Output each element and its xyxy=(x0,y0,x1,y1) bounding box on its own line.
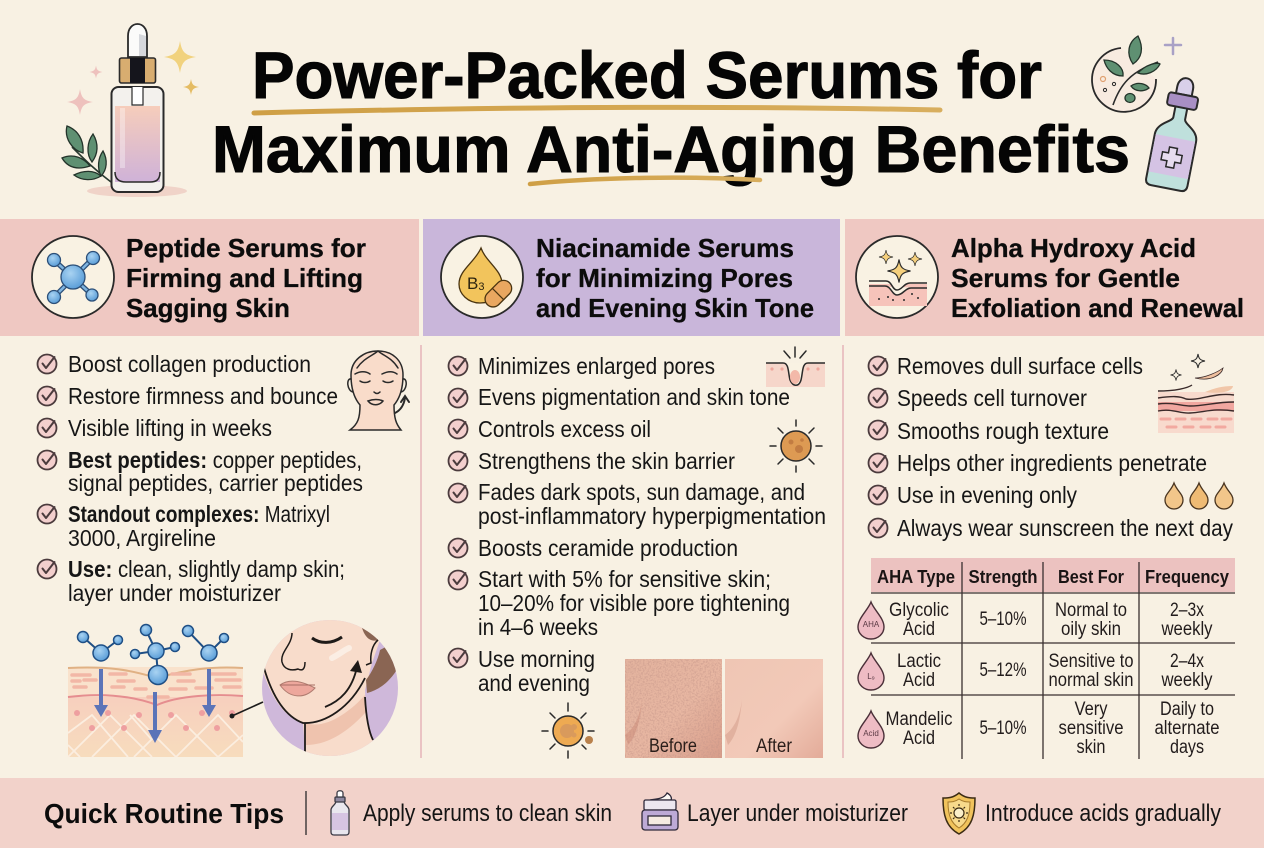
before photo xyxy=(625,659,722,758)
table row: glycolic acid: oily skin xyxy=(1061,619,1121,640)
niacinamide checklist: post-inflammatory hyperpigmentation xyxy=(478,503,826,529)
table row: mandelic acid: days xyxy=(1170,737,1204,758)
table row: glycolic acid: AHA xyxy=(863,620,880,629)
table row: lactic acid: normal skin xyxy=(1048,670,1134,691)
table row: lactic acid xyxy=(858,651,1213,691)
niacinamide checklist: Use morning xyxy=(478,646,595,672)
table row: glycolic acid: weekly xyxy=(1161,619,1213,640)
panel: alpha hydroxy acid serums xyxy=(845,219,1264,759)
niacinamide checklist: Boosts ceramide production xyxy=(478,535,738,561)
niacinamide heading: and Evening Skin Tone xyxy=(536,293,814,323)
icon: moisturizer jar xyxy=(642,793,678,830)
peptide checklist: signal peptides, carrier peptides xyxy=(68,470,363,496)
peptide header band xyxy=(0,219,419,336)
table row: lactic acid: Acid xyxy=(903,670,935,691)
after photo xyxy=(725,659,823,758)
table header row: Frequency xyxy=(1145,566,1230,587)
panel: peptide serums xyxy=(0,219,419,762)
AHA checklist xyxy=(868,353,1233,541)
niacinamide checklist: Start with 5% for sensitive skin; xyxy=(478,566,771,592)
niacinamide checklist: Evens pigmentation and skin tone xyxy=(478,384,790,410)
table row: glycolic acid: Normal to xyxy=(1055,600,1127,621)
table row: mandelic acid: alternate xyxy=(1154,718,1220,739)
peptide checklist: layer under moisturizer xyxy=(68,580,281,606)
icon: B3 drop and capsule: 3 xyxy=(478,281,484,293)
tip: apply serums: Apply serums to clean skin xyxy=(363,800,612,827)
table row: mandelic acid: Acid xyxy=(903,728,935,749)
peptide checklist: Restore firmness and bounce xyxy=(68,383,338,409)
peptide checklist: 3000, Argireline xyxy=(68,525,216,551)
footer heading: Quick Routine Tips xyxy=(44,798,284,829)
table row: lactic acid: 5–12% xyxy=(980,660,1027,681)
icon: botanical circle xyxy=(1092,36,1160,112)
niacinamide heading xyxy=(536,233,814,323)
niacinamide checklist: Strengthens the skin barrier xyxy=(478,448,735,474)
illustration: face profile circle xyxy=(262,620,398,756)
icon: serum dropper bottle with leaves and sparkles xyxy=(62,24,199,197)
before photo: Before xyxy=(649,736,697,757)
table row: glycolic acid: Acid xyxy=(903,619,935,640)
tip: layer under moisturizer: Layer under moisturizer xyxy=(687,800,908,827)
table row: lactic acid: Sensitive to xyxy=(1048,651,1134,672)
table row: mandelic acid: Daily to xyxy=(1160,699,1214,720)
table header row: Best For xyxy=(1058,566,1124,587)
peptide heading xyxy=(126,233,366,323)
title: Maximum Anti-Aging Benefits xyxy=(212,112,1130,186)
peptide heading: Peptide Serums for xyxy=(126,233,366,263)
footer: quick routine tips xyxy=(0,778,1264,848)
table row: glycolic acid: 2–3x xyxy=(1170,600,1204,621)
AHA heading: Alpha Hydroxy Acid xyxy=(951,233,1196,263)
peptide checklist: Boost collagen production xyxy=(68,351,311,377)
niacinamide checklist xyxy=(448,353,826,696)
peptide checklist: Best peptides: copper peptides, xyxy=(68,447,362,473)
table header row: AHA Type xyxy=(877,566,955,587)
icon: sun with spots xyxy=(770,420,822,472)
illustration: peptides penetrating skin layers xyxy=(68,624,263,757)
AHA heading: Exfoliation and Renewal xyxy=(951,293,1244,323)
icon: tilted serum bottle with cross xyxy=(1145,74,1208,192)
icon: face with lifting arrow xyxy=(348,351,409,430)
niacinamide heading: for Minimizing Pores xyxy=(536,263,793,293)
title: Power-Packed Serums for xyxy=(252,38,1042,112)
icon: three amber drops xyxy=(1165,483,1233,509)
table row: lactic acid: weekly xyxy=(1161,670,1213,691)
table row: mandelic acid: Mandelic xyxy=(886,709,952,730)
peptide checklist: Standout complexes: Matrixyl xyxy=(68,501,330,527)
icon: exfoliation sparkles xyxy=(856,236,938,318)
table row: mandelic acid: skin xyxy=(1076,737,1106,758)
table row: mandelic acid: 5–10% xyxy=(980,718,1027,739)
after photo: After xyxy=(756,736,793,757)
peptide checklist xyxy=(38,351,363,606)
AHA heading: Serums for Gentle xyxy=(951,263,1180,293)
table row: lactic acid: L₉ xyxy=(867,672,875,681)
icon: enlarged pore xyxy=(766,347,825,387)
AHA heading xyxy=(951,233,1244,323)
peptide heading: Firming and Lifting xyxy=(126,263,363,293)
icon: exfoliating skin layers xyxy=(1158,354,1234,433)
table row: glycolic acid xyxy=(858,600,1213,640)
table row: glycolic acid: Glycolic xyxy=(889,600,949,621)
AHA checklist: Speeds cell turnover xyxy=(897,385,1087,411)
icon: sun with orange spots xyxy=(542,703,594,758)
niacinamide checklist: in 4–6 weeks xyxy=(478,614,598,640)
icon: B3 drop and capsule: B xyxy=(467,274,478,293)
table header row: Strength xyxy=(968,566,1038,587)
table header row xyxy=(877,566,1230,587)
title xyxy=(212,38,1130,186)
niacinamide checklist: Minimizes enlarged pores xyxy=(478,353,715,379)
icon: plus sparkle xyxy=(1165,38,1181,54)
AHA comparison table xyxy=(858,558,1235,759)
icon: sun shield xyxy=(943,793,975,834)
niacinamide checklist: and evening xyxy=(478,670,590,696)
panel: niacinamide serums xyxy=(423,219,840,758)
AHA checklist: Always wear sunscreen the next day xyxy=(897,515,1233,541)
niacinamide checklist: Fades dark spots, sun damage, and xyxy=(478,479,805,505)
icon: molecule xyxy=(32,236,114,318)
peptide heading: Sagging Skin xyxy=(126,293,290,323)
icon: B3 drop and capsule xyxy=(441,236,523,318)
table row: mandelic acid: Very xyxy=(1074,699,1108,720)
niacinamide heading: Niacinamide Serums xyxy=(536,233,794,263)
AHA checklist: Removes dull surface cells xyxy=(897,353,1143,379)
table row: lactic acid: Lactic xyxy=(897,651,941,672)
table row: glycolic acid: 5–10% xyxy=(980,609,1027,630)
peptide checklist: Visible lifting in weeks xyxy=(68,415,272,441)
divider between panels xyxy=(421,345,843,758)
AHA checklist: Smooths rough texture xyxy=(897,418,1109,444)
icon: small serum bottle xyxy=(331,791,349,835)
peptide checklist: Use: clean, slightly damp skin; xyxy=(68,556,345,582)
niacinamide header band xyxy=(423,219,840,336)
footer divider xyxy=(305,791,307,835)
header banner xyxy=(62,24,1208,197)
AHA checklist: Use in evening only xyxy=(897,482,1077,508)
tip: introduce acids: Introduce acids gradually xyxy=(985,800,1221,827)
table row: mandelic acid: sensitive xyxy=(1058,718,1124,739)
table row: lactic acid: 2–4x xyxy=(1170,651,1204,672)
niacinamide checklist: Controls excess oil xyxy=(478,416,651,442)
AHA checklist: Helps other ingredients penetrate xyxy=(897,450,1207,476)
table row: mandelic acid: Acid xyxy=(863,729,879,738)
table row: mandelic acid xyxy=(858,699,1220,758)
AHA header band xyxy=(845,219,1264,336)
niacinamide checklist: 10–20% for visible pore tightening xyxy=(478,590,790,616)
